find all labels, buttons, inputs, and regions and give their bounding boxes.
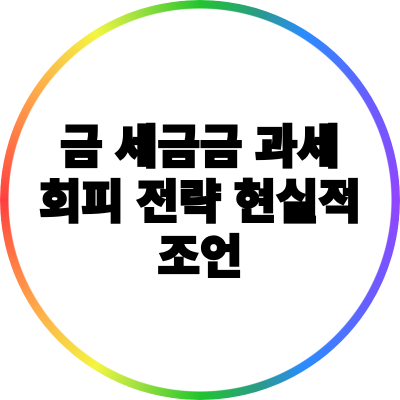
title — [39, 121, 361, 283]
title: 회피 전략 현실적 — [39, 176, 361, 228]
title: 조언 — [158, 231, 242, 283]
title: 금 세금금 과세 — [60, 121, 340, 173]
